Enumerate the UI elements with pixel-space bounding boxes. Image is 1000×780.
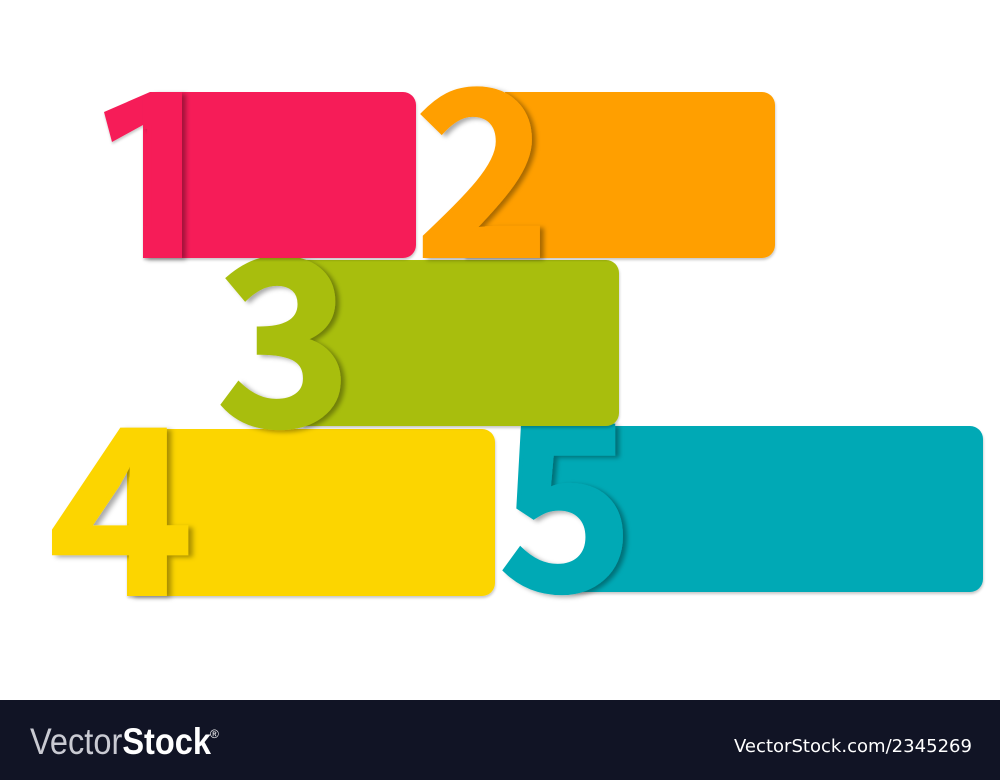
item 4: yellow banner — [49, 329, 495, 660]
item 1: pink banner — [104, 91, 418, 263]
digit 5: 5 — [499, 326, 634, 656]
pink card with flag — [104, 92, 416, 258]
VectorStock logo: VectorStock — [30, 721, 211, 762]
footer bar — [0, 700, 1000, 780]
digit 1: 1 — [94, 0, 229, 322]
yellow card — [127, 429, 495, 596]
image id url: VectorStock.com/2345269 — [734, 736, 972, 757]
item 5: teal banner — [499, 326, 983, 656]
teal card — [530, 426, 983, 592]
item 2: orange banner — [415, 0, 775, 322]
item 3: green banner — [217, 161, 619, 491]
registered mark: ® — [210, 727, 219, 741]
green card — [303, 260, 619, 426]
digit 3: 3 — [217, 161, 352, 491]
digit 2: 2 — [415, 0, 550, 322]
orange card — [465, 92, 775, 258]
digit 4: 4 — [49, 329, 193, 660]
